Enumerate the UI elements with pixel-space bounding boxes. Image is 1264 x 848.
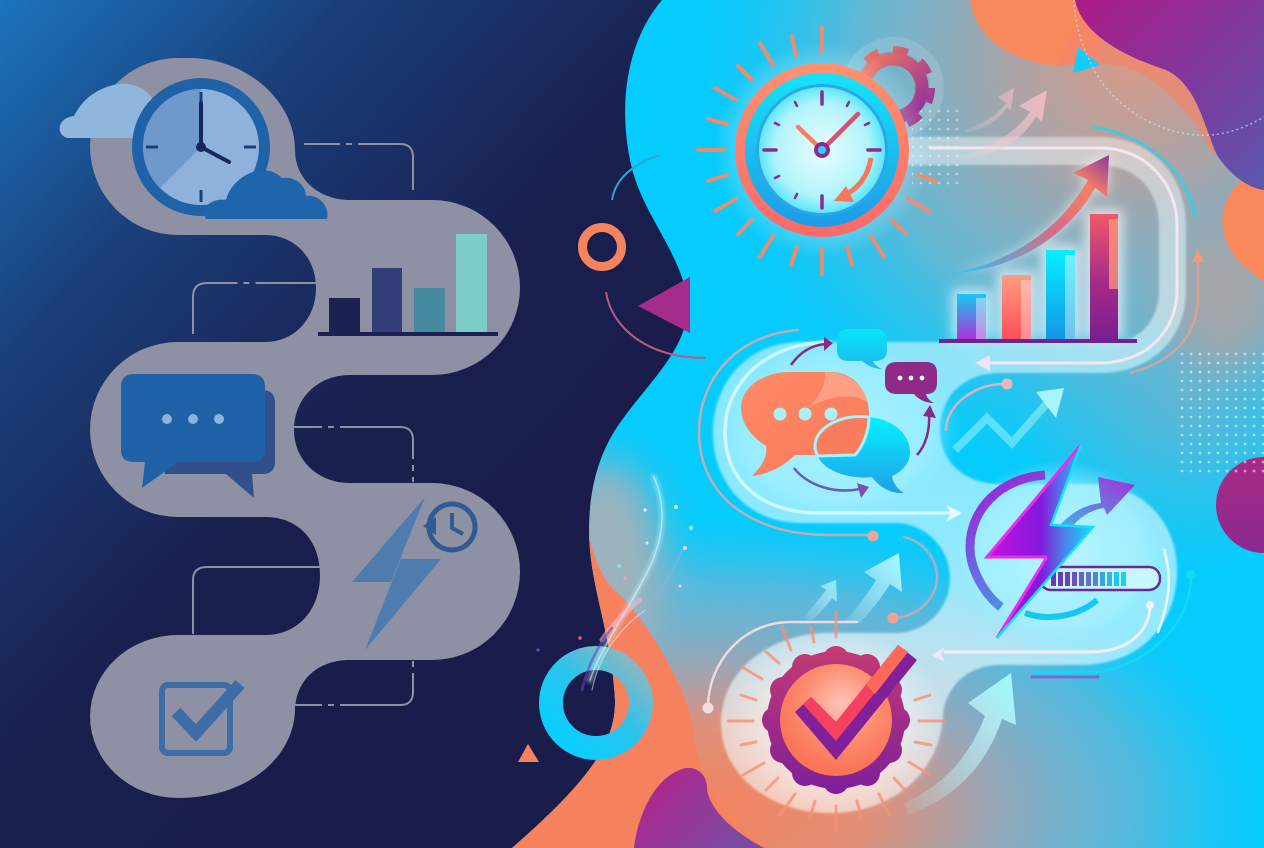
blue grey right wash	[1042, 332, 1264, 552]
icon: muted clock with clouds	[60, 78, 328, 219]
panel: right colourful blob	[500, 0, 1264, 848]
halftone dots	[912, 110, 958, 184]
warm bottom wash	[500, 520, 1264, 848]
ribbon inner lines	[699, 148, 1191, 708]
icon: magenta triangle	[638, 277, 690, 333]
warm right edge wash	[1165, 230, 1264, 370]
warm top right wash	[728, 0, 1264, 454]
sparkle dots	[536, 505, 693, 652]
purple bottom blob	[634, 768, 764, 848]
small cyan bubble	[837, 329, 887, 369]
blue bubble	[817, 417, 910, 493]
orange top blob	[970, 0, 1100, 66]
orange bottom-left blob	[500, 520, 764, 848]
bar glow	[952, 155, 1123, 340]
sun rays	[698, 27, 935, 274]
icon: circle ring orange	[582, 228, 622, 266]
ribbon glow around lightning	[974, 463, 1148, 624]
icon: cyan ring	[551, 658, 641, 748]
icon: muted bar chart	[318, 234, 498, 336]
purple top-right blob	[1075, 0, 1264, 190]
icon: bright bar chart with rising arrow	[939, 155, 1137, 343]
panel: left muted process ribbon	[60, 58, 520, 798]
bubble overlap	[815, 417, 869, 456]
ribbon glow around badge	[742, 639, 930, 804]
icon: thin arrows around charts	[975, 127, 1204, 373]
icon: arrow thin lines and points	[702, 505, 1016, 815]
icon: chat bubbles	[741, 329, 937, 498]
icon: muted lightning with clock	[352, 497, 475, 650]
check mark	[795, 645, 917, 760]
dashed connector lines	[193, 144, 413, 705]
orange right blob	[1222, 170, 1264, 282]
grey left edge wash	[545, 460, 665, 680]
icon: thin arcs around triangle	[606, 155, 705, 358]
swoosh light streaks	[582, 477, 682, 690]
thin dotted arc	[1074, 0, 1264, 135]
icon: muted chat bubbles	[121, 374, 275, 498]
icon: bright clock with sun rays	[698, 27, 935, 274]
ribbon shape	[90, 58, 520, 798]
ribbon glow around chat	[732, 338, 956, 506]
icon: small arrows up	[803, 530, 1196, 624]
icon: cyan triangle top	[1073, 47, 1100, 73]
lightning bolt	[987, 445, 1093, 638]
blob base colour	[500, 0, 1264, 848]
small purple bubble	[885, 362, 937, 403]
icon: growth arrows top	[957, 88, 1047, 160]
icon: small trend line	[955, 378, 1064, 450]
icon: small orange triangle	[518, 744, 539, 762]
icon: gear behind clock	[849, 44, 937, 132]
chat arrows	[791, 344, 929, 490]
icon: lightning with progress bar	[970, 445, 1160, 638]
scalloped seal	[762, 646, 910, 794]
icon: badge with check	[728, 612, 945, 831]
badge rays	[728, 612, 945, 831]
light flowing ribbon	[713, 137, 1186, 813]
icon: muted checkbox	[162, 684, 240, 753]
purple right circle	[1216, 457, 1264, 553]
soft orange wedge under purple	[1069, 38, 1218, 156]
orange bubble	[741, 372, 869, 476]
